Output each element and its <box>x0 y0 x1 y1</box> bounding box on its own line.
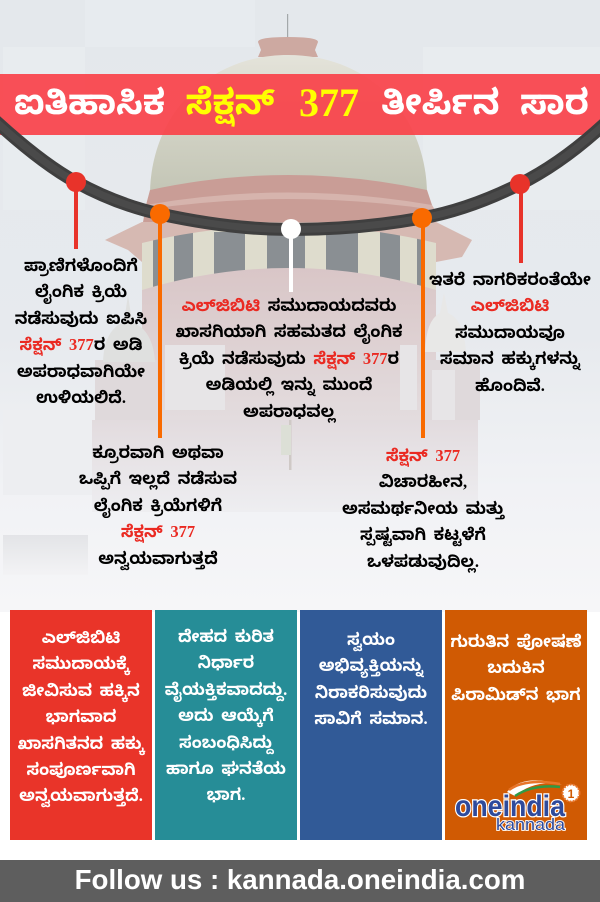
text block: lower right: ಸೆಕ್ಷನ್ 377 <box>386 446 460 465</box>
title <box>14 80 589 127</box>
panel: orange card: ಪಿರಾಮಿಡ್‌ನ ಭಾಗ <box>451 685 581 704</box>
text block: lower right: ವಿಚಾರಹೀನ, <box>379 472 467 491</box>
panel: red card: ಅನ್ವಯವಾಗುತ್ತದೆ. <box>19 786 143 805</box>
panel: orange card: ಗುರುತಿನ ಪೋಷಣೆ <box>450 632 582 651</box>
text block: lower left: ಲೈಂಗಿಕ ಕ್ರಿಯೆಗಳಿಗೆ <box>94 496 222 515</box>
text block: upper left: ನಡೆಸುವುದು ಐಪಿಸಿ <box>15 309 147 328</box>
title: 377 <box>299 80 359 125</box>
panel: teal card: ಹಾಗೂ ಘನತೆಯ <box>166 759 286 778</box>
text block: lower left: ಅನ್ವಯವಾಗುತ್ತದೆ <box>98 549 218 568</box>
panel: teal card <box>155 610 297 840</box>
text block: lower right: ಅಸಮರ್ಥನೀಯ ಮತ್ತು <box>342 499 504 518</box>
panel: blue card: ಅಭಿವ್ಯಕ್ತಿಯನ್ನು <box>319 656 423 675</box>
text block: upper right: ಇತರೆ ನಾಗರಿಕರಂತೆಯೇ <box>429 270 591 289</box>
panel: red card: ಎಲ್‌ಜಿಬಿಟಿ <box>42 628 120 647</box>
panel: red card: ಸಂಪೂರ್ಣವಾಗಿ <box>26 760 136 779</box>
title: ತೀರ್ಪಿನ <box>381 83 500 122</box>
text block: upper left: ಪ್ರಾಣಿಗಳೊಂದಿಗೆ <box>24 256 138 275</box>
text block: centre: ಅಪರಾಧವಲ್ಲ <box>243 402 335 421</box>
timeline cable and connectors <box>0 116 600 438</box>
text block: upper right <box>429 270 591 395</box>
panel: teal card: ಅದು ಆಯ್ಕೆಗೆ <box>178 706 274 725</box>
panel: teal card: ಭಾಗ. <box>207 785 245 804</box>
text block: upper left <box>15 256 147 407</box>
logo: oneindia kannada: kannada <box>496 815 566 834</box>
text block: upper left: ಸೆಕ್ಷನ್ 377ರ ಅಡಿ <box>20 335 142 354</box>
panel: blue card: ನಿರಾಕರಿಸುವುದು <box>315 683 427 702</box>
panel: red card <box>10 610 152 840</box>
logo: oneindia kannada: 1 <box>568 787 575 801</box>
footer bar <box>0 860 600 902</box>
text block: centre <box>175 296 403 423</box>
text block: lower left: ಒಪ್ಪಿಗೆ ಇಲ್ಲದೆ ನಡೆಸುವ <box>79 469 237 488</box>
panel: blue card <box>300 610 442 840</box>
text block: lower left: ಕ್ರೂರವಾಗಿ ಅಥವಾ <box>92 443 224 462</box>
title: ಸೆಕ್ಷನ್ <box>186 83 274 122</box>
panel: blue card: ಸಾವಿಗೆ ಸಮಾನ. <box>314 709 428 728</box>
connector: orange right <box>412 208 432 438</box>
text block: centre: ಎಲ್‌ಜಿಬಿಟಿ ಸಮುದಾಯದವರು <box>182 296 396 315</box>
panel: red card: ಜೀವಿಸುವ ಹಕ್ಕಿನ <box>22 681 140 700</box>
title: ಸಾರ <box>520 83 589 122</box>
text block: lower right <box>342 446 505 573</box>
text block: lower right: ಸ್ಪಷ್ಟವಾಗಿ ಕಟ್ಟಳೆಗೆ <box>360 525 486 544</box>
text block: centre: ಖಾಸಗಿಯಾಗಿ ಸಹಮತದ ಲೈಂಗಿಕ <box>175 322 403 341</box>
background: supreme court building <box>0 0 600 612</box>
text block: upper right: ಹೊಂದಿವೆ. <box>475 376 545 395</box>
text block: upper left: ಅಪರಾಧವಾಗಿಯೇ <box>17 362 145 381</box>
title banner <box>0 74 600 135</box>
text block: lower left <box>79 443 237 570</box>
connector: red right <box>510 174 530 263</box>
logo: oneindia kannada: oneindia <box>455 790 565 823</box>
panel: teal card: ನಿರ್ಧಾರ <box>198 653 254 672</box>
footer bar: Follow us : kannada.oneindia.com <box>75 864 525 895</box>
title: ಐತಿಹಾಸಿಕ <box>14 83 165 122</box>
connector: orange left <box>150 204 170 438</box>
panel: teal card: ದೇಹದ ಕುರಿತ <box>178 627 274 646</box>
connector: red left <box>66 172 86 249</box>
logo: oneindia kannada <box>454 780 580 834</box>
connector: white centre <box>281 219 301 292</box>
panel: teal card: ವೈಯಕ್ತಿಕವಾದದ್ದು. <box>165 680 287 699</box>
panel: blue card: ಸ್ವಯಂ <box>347 630 395 649</box>
text block: upper left: ಉಳಿಯಲಿದೆ. <box>36 388 126 407</box>
text block: centre: ಕ್ರಿಯೆ ನಡೆಸುವುದು ಸೆಕ್ಷನ್ 377ರ <box>179 349 399 368</box>
text block: upper right: ಸಮುದಾಯವೂ <box>455 323 565 342</box>
text block: upper left: ಲೈಂಗಿಕ ಕ್ರಿಯೆ <box>35 282 127 301</box>
panel: red card: ಭಾಗವಾದ <box>46 707 116 726</box>
text block: lower left: ಸೆಕ್ಷನ್ 377 <box>121 522 195 541</box>
text block: centre: ಅಡಿಯಲ್ಲಿ ಇನ್ನು ಮುಂದೆ <box>206 375 372 394</box>
text block: upper right: ಸಮಾನ ಹಕ್ಕುಗಳನ್ನು <box>440 349 580 368</box>
panel: orange card: ಬದುಕಿನ <box>487 658 545 677</box>
text block: upper right: ಎಲ್‌ಜಿಬಿಟಿ <box>471 296 549 315</box>
panel: red card: ಸಮುದಾಯಕ್ಕೆ <box>33 654 129 673</box>
text block: lower right: ಒಳಪಡುವುದಿಲ್ಲ. <box>367 552 479 571</box>
panel: teal card: ಸಂಬಂಧಿಸಿದ್ದು <box>179 733 273 752</box>
panel: red card: ಖಾಸಗಿತನದ ಹಕ್ಕು <box>18 734 144 753</box>
panel: orange card <box>445 610 587 840</box>
